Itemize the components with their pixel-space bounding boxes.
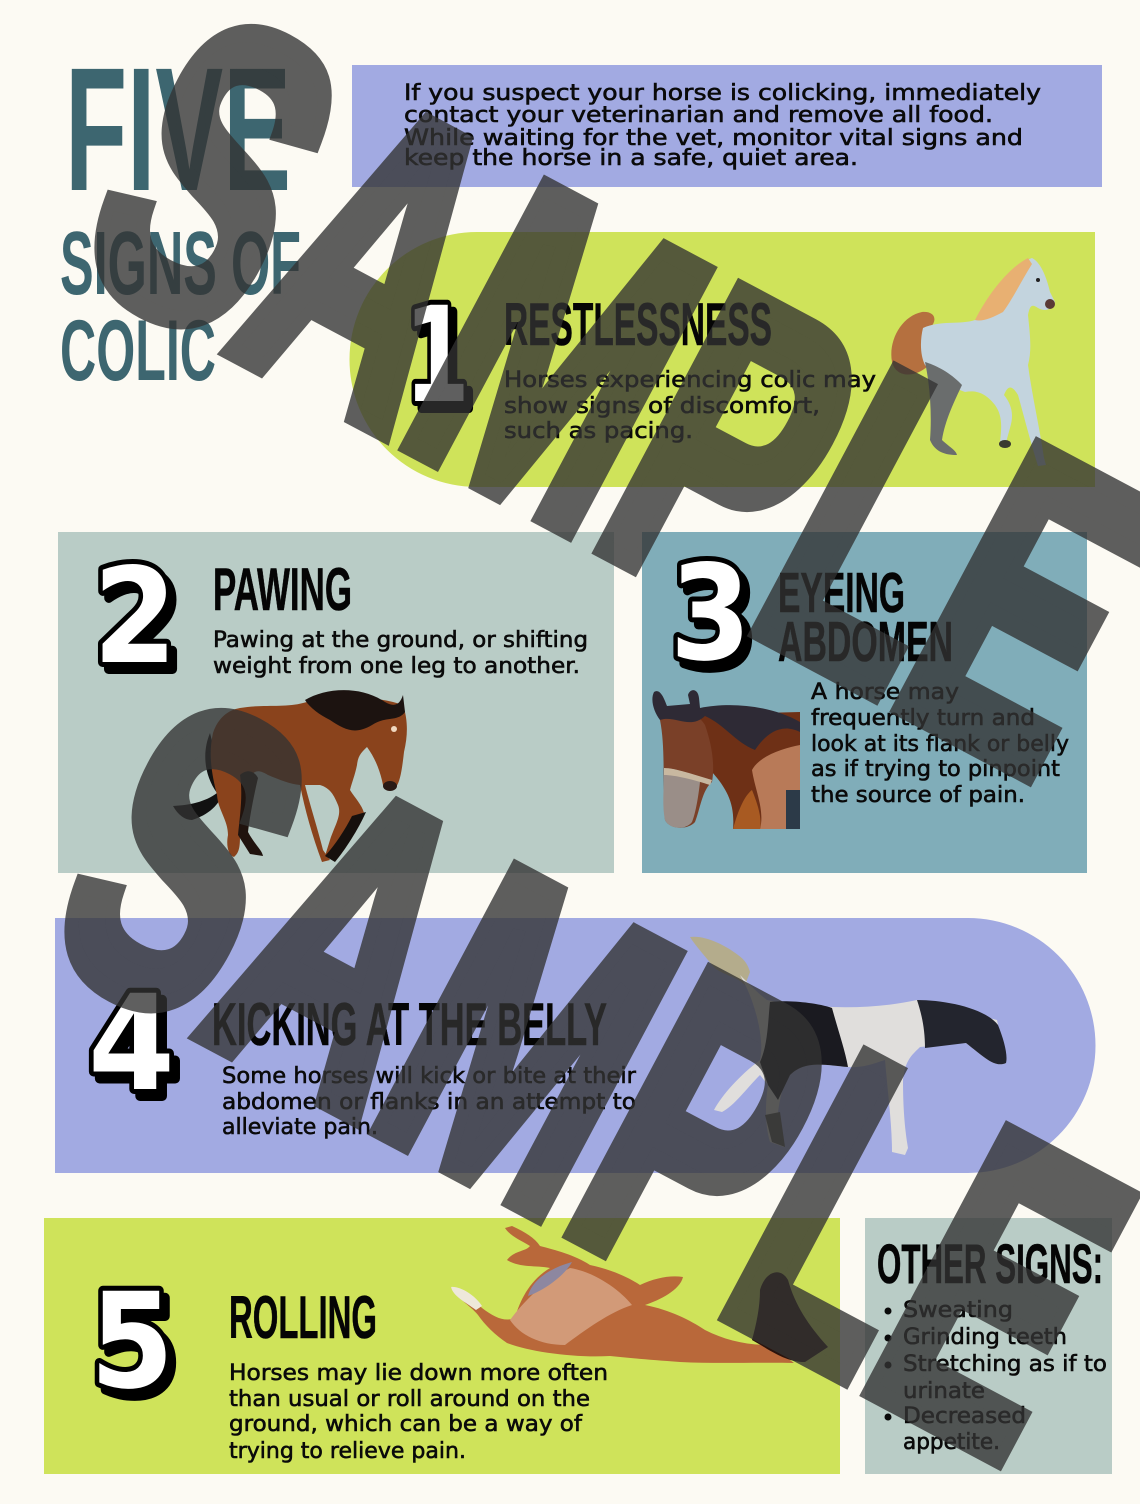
text: eyeing abdomen description: A horse may (811, 680, 959, 705)
number 5: 5 (96, 1272, 180, 1426)
number 3: 3 (676, 544, 757, 698)
text: pawing description: Pawing at the ground, or shifting (213, 628, 588, 653)
text: eyeing abdomen description (811, 680, 1069, 808)
text: rolling description: trying to relieve pain. (229, 1439, 466, 1464)
list: other signs: Grinding teeth (903, 1325, 1067, 1350)
icon: white horse (891, 258, 1055, 466)
title: SIGNS OF (60, 214, 301, 314)
icon: rolling horse (451, 1226, 828, 1363)
title: FIVE (65, 32, 291, 228)
heading: eyeing abdomen: EYEING (778, 561, 905, 625)
panel: intro callout (352, 65, 1102, 187)
text: kicking description: abdomen or flanks in an attempt to (222, 1090, 636, 1115)
number 2: 2 (93, 540, 177, 694)
icon: brown horse (173, 690, 407, 862)
number 4: 4 (88, 967, 175, 1121)
text: kicking description: alleviate pain. (222, 1115, 378, 1140)
text: restlessness description (504, 368, 876, 444)
number 1: 1 (410, 286, 476, 440)
text: restlessness description: such as pacing. (504, 419, 693, 444)
text: restlessness description: show signs of discomfort, (504, 394, 820, 419)
text: kicking description (222, 1064, 637, 1140)
text: restlessness description: Horses experiencing colic may (504, 368, 876, 393)
text: rolling description: ground, which can be a way of (229, 1412, 583, 1437)
number 5: 5 (90, 1265, 174, 1419)
icon: pinto horse (690, 937, 1007, 1155)
panel: other signs (865, 1218, 1112, 1474)
number 3: 3 (670, 537, 751, 691)
text: kicking description: Some horses will kick or bite at their (222, 1064, 637, 1089)
panel: sign 3 eyeing abdomen (642, 532, 1087, 873)
list: other signs: appetite. (903, 1430, 1000, 1455)
panel: sign 4 kicking at the belly (55, 918, 1096, 1173)
panel: intro callout: keep the horse in a safe, quiet area. (404, 146, 858, 171)
list: other signs: Decreased (903, 1404, 1026, 1429)
panel: intro callout: While waiting for the vet, monitor vital signs and (404, 126, 1023, 151)
heading: pawing: PAWING (213, 556, 352, 623)
text: eyeing abdomen description: as if trying to pinpoint (811, 757, 1060, 782)
heading: rolling: ROLLING (229, 1284, 377, 1351)
text: rolling description: than usual or roll around on the (229, 1387, 590, 1412)
text: pawing description: weight from one leg to another. (213, 654, 580, 679)
list: other signs: urinate (903, 1379, 985, 1404)
heading: kicking at the belly: KICKING AT THE BELLY (212, 991, 607, 1058)
heading: eyeing abdomen: ABDOMEN (778, 610, 953, 674)
title: COLIC (60, 303, 216, 399)
icon: horse head (652, 690, 800, 829)
panel: intro callout: If you suspect your horse is colicking, immediately (404, 81, 1041, 106)
text: rolling description (229, 1361, 608, 1464)
heading: eyeing abdomen (778, 561, 953, 674)
text: eyeing abdomen description: the source of pain. (811, 783, 1025, 808)
text: eyeing abdomen description: look at its flank or belly (811, 732, 1069, 757)
list: other signs: Sweating (903, 1298, 1013, 1323)
panel: sign 1 restlessness (350, 232, 1095, 487)
panel: intro callout: contact your veterinarian and remove all food. (404, 103, 993, 128)
text: eyeing abdomen description: frequently turn and (811, 706, 1035, 731)
heading: restlessness: RESTLESSNESS (504, 291, 772, 358)
list: other signs: Stretching as if to (903, 1352, 1107, 1377)
text: rolling description: Horses may lie down more often (229, 1361, 608, 1386)
number 2: 2 (99, 547, 183, 701)
panel: sign 2 pawing (58, 532, 614, 873)
title (60, 32, 301, 399)
list: other signs (884, 1298, 1107, 1455)
number 4: 4 (94, 974, 181, 1128)
text: pawing description (213, 628, 588, 679)
number 1: 1 (404, 279, 470, 433)
panel: sign 5 rolling (44, 1218, 840, 1474)
